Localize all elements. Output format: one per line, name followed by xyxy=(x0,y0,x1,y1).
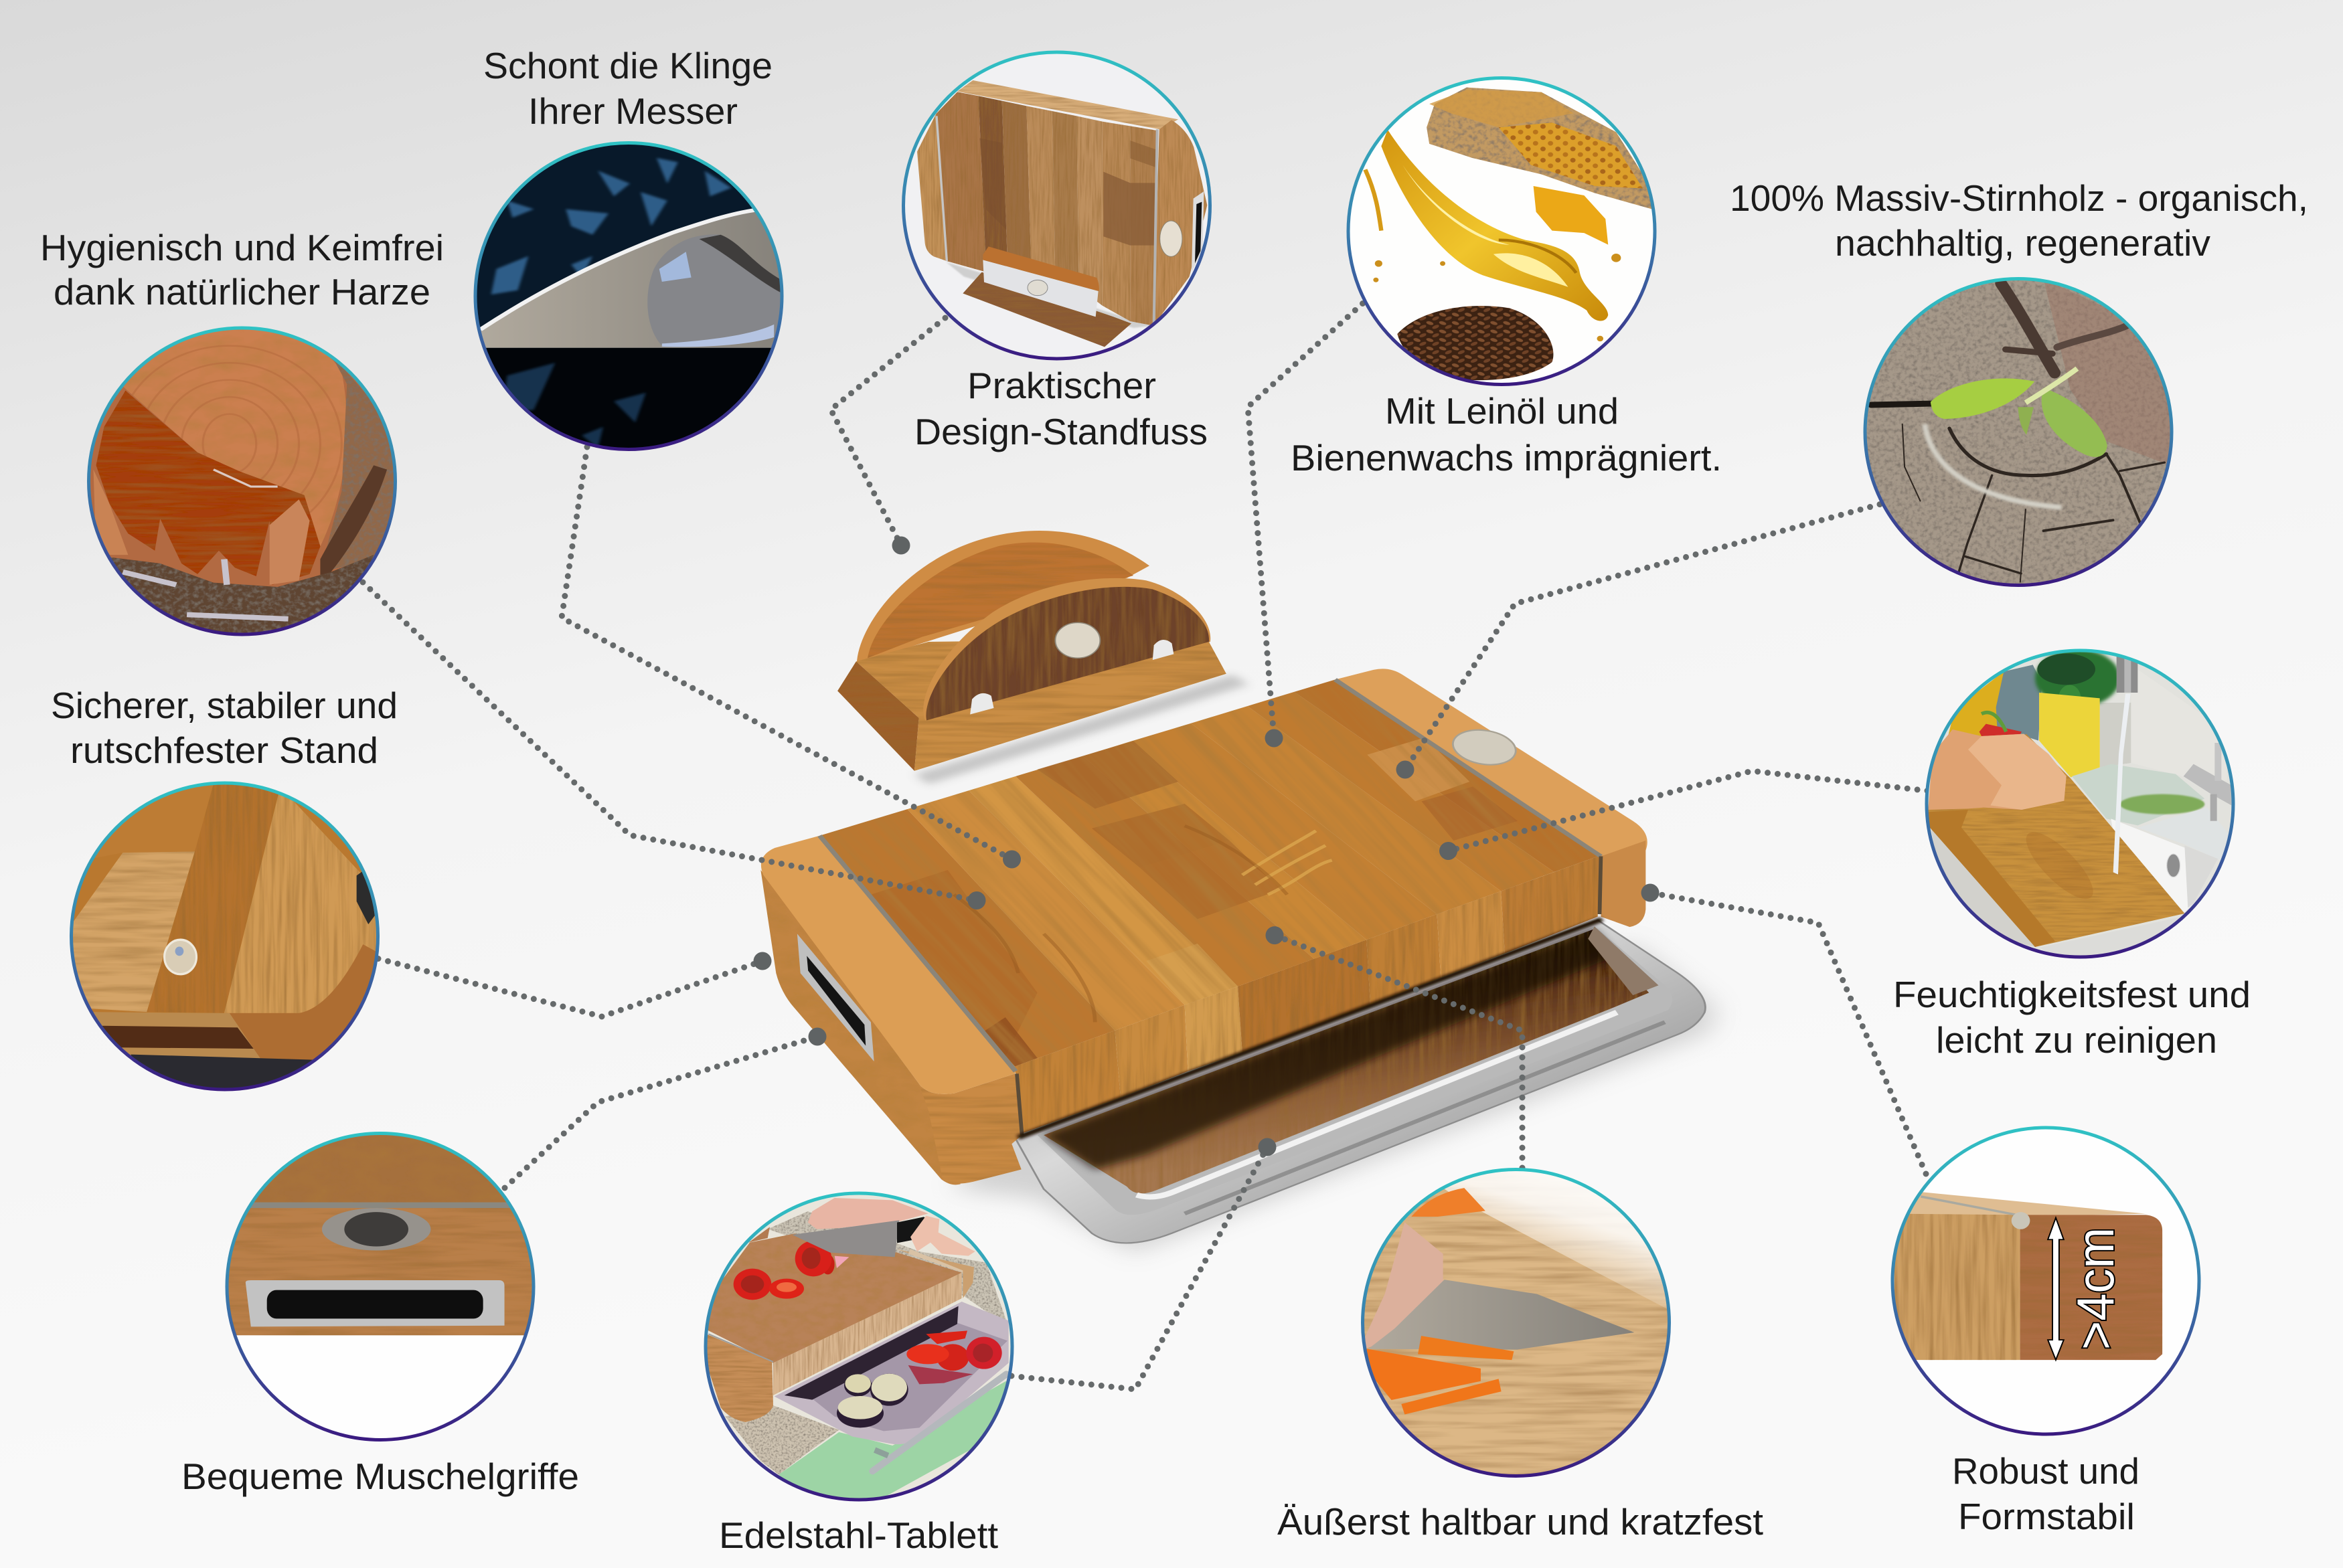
label: Praktischer Design-Standfuss: Design-Standfuss xyxy=(914,411,1208,452)
label: Sicherer Stand: rutschfester Stand xyxy=(70,729,378,771)
left end cap xyxy=(760,870,961,1185)
photo circle: knife on board xyxy=(1352,1162,1682,1489)
block patches xyxy=(1038,741,1178,808)
label: Sicherer Stand: Sicherer, stabiler und xyxy=(51,685,398,726)
label: Hygienisch und Keimfrei xyxy=(40,227,444,313)
thickness label: >4cm xyxy=(2066,1227,2125,1350)
stand badge xyxy=(1055,622,1100,658)
connector: resin to board xyxy=(363,582,985,909)
end-grain top columns xyxy=(819,679,1601,1066)
photo circle: resin on log xyxy=(87,327,397,636)
photo circle: sprout on tree stump xyxy=(1860,270,2178,595)
connector: stand photo to stand xyxy=(831,318,945,554)
grain along columns xyxy=(823,692,1576,1064)
photo circle: tomatoes and steel tray xyxy=(703,1191,1016,1504)
label: Sicherer Stand xyxy=(51,685,398,771)
arrow: thickness xyxy=(2048,1218,2064,1360)
label: Feuchtigkeitsfest xyxy=(1893,974,2251,1061)
label: Edelstahl-Tablett: Edelstahl-Tablett xyxy=(719,1514,998,1556)
label: 100% Massiv-Stirnholz: nachhaltig, regenerativ xyxy=(1835,222,2210,264)
connector: tray photo to tray xyxy=(1012,1138,1276,1389)
label: Schont die Klinge: Schont die Klinge xyxy=(483,45,773,86)
connector: scratch resistance to board xyxy=(1265,926,1522,1168)
steel strips xyxy=(819,836,1016,1071)
steel tray xyxy=(1015,920,1705,1243)
label: Bequeme Muschelgriffe: Bequeme Muschelgriffe xyxy=(181,1456,579,1497)
photo circle: linseed oil and beeswax xyxy=(1347,76,1656,386)
label: Praktischer Design-Standfuss: Praktischer xyxy=(967,365,1156,406)
connector: handle photo to handle xyxy=(505,1028,826,1188)
label: Mit Leinöl und Bienenwachs xyxy=(1291,390,1722,478)
connector: oil to board xyxy=(1248,304,1363,747)
label: Praktischer Design-Standfuss xyxy=(914,365,1208,452)
label: Robust und Formstabil xyxy=(1952,1450,2139,1537)
handle xyxy=(797,934,874,1061)
connector: foot photo to board xyxy=(378,952,771,1017)
photo circle: thickness over 4cm xyxy=(1890,1126,2201,1436)
connector: end grain to board xyxy=(1396,505,1880,779)
board badge xyxy=(1448,725,1521,770)
label: Robust und Formstabil: Formstabil xyxy=(1958,1496,2135,1537)
front face xyxy=(1015,855,1601,1134)
photo circle: board under tap xyxy=(1923,649,2236,962)
photo circle: board on stand xyxy=(899,49,1216,361)
label: Schont die Klinge: Ihrer Messer xyxy=(528,90,738,132)
photo circle: knife blade xyxy=(465,137,795,459)
label: Feuchtigkeitsfest: leicht zu reinigen xyxy=(1936,1019,2217,1061)
label: Robust und Formstabil: Robust und xyxy=(1952,1450,2139,1492)
label: Hygienisch und Keimfrei: dank natürlicher Harze xyxy=(54,271,430,313)
connector: blade to board xyxy=(562,447,1021,869)
photo circle: non-slip foot xyxy=(64,772,384,1105)
connector: washing to board xyxy=(1439,771,1927,860)
label: Mit Leinöl und Bienenwachs: Mit Leinöl und xyxy=(1385,390,1619,432)
right end cap xyxy=(1335,669,1647,858)
label: Hygienisch und Keimfrei: Hygienisch und Keimfrei xyxy=(40,227,444,268)
label: 100% Massiv-Stirnholz: 100% Massiv-Stirnholz - organisch, xyxy=(1730,177,2308,219)
label: Schont die Klinge xyxy=(483,45,773,132)
label: 100% Massiv-Stirnholz xyxy=(1730,177,2308,264)
product: cutting board with steel tray xyxy=(449,289,1969,1455)
photo circle: shell handle xyxy=(219,1122,544,1449)
product: stand xyxy=(837,531,1248,784)
connector: thickness to board xyxy=(1641,883,1926,1174)
label: Feuchtigkeitsfest: Feuchtigkeitsfest und xyxy=(1893,974,2251,1015)
label: Mit Leinöl und Bienenwachs: Bienenwachs imprägniert. xyxy=(1291,437,1722,478)
label: Äußerst haltbar und kratzfest: Äußerst haltbar und kratzfest xyxy=(1277,1501,1763,1543)
